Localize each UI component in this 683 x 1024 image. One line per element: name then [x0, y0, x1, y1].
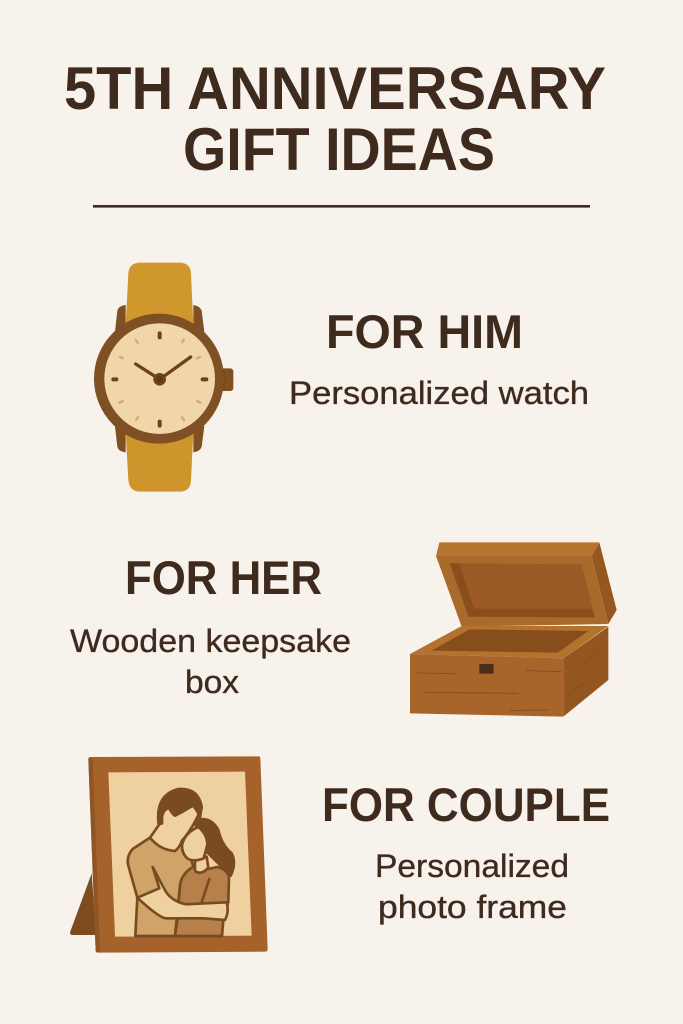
man's hair: [158, 789, 202, 824]
woman's hair: [195, 819, 234, 876]
panel: for him: [94, 263, 589, 492]
panel: for couple: [70, 756, 610, 953]
woman's shirt: [175, 866, 229, 936]
woman's face: [182, 827, 207, 860]
text: personalized photo frame: Personalized: [375, 848, 569, 884]
title: 5TH ANNIVERSARY: [64, 55, 606, 122]
heading: for her: FOR HER: [125, 551, 322, 604]
text: personalized photo frame: [375, 848, 569, 925]
panel: for her: [70, 542, 617, 717]
man's shirt: [128, 838, 193, 936]
man's head and neck: [150, 802, 202, 851]
man's arm: [137, 867, 228, 920]
woman's neck: [195, 857, 208, 873]
heading: for couple: FOR COUPLE: [322, 778, 610, 831]
heading: for him: FOR HIM: [326, 305, 523, 358]
text: personalized photo frame: photo frame: [378, 889, 567, 925]
text: personalized watch: Personalized watch: [289, 375, 589, 411]
text: wooden keepsake box: box: [185, 664, 239, 700]
text: wooden keepsake box: [70, 623, 351, 700]
icon: watch: [94, 263, 233, 492]
icon: wooden box: [410, 542, 617, 717]
title: [64, 55, 606, 183]
title: GIFT IDEAS: [183, 116, 495, 183]
text: wooden keepsake box: Wooden keepsake: [70, 623, 351, 659]
icon: photo frame: [70, 756, 268, 953]
